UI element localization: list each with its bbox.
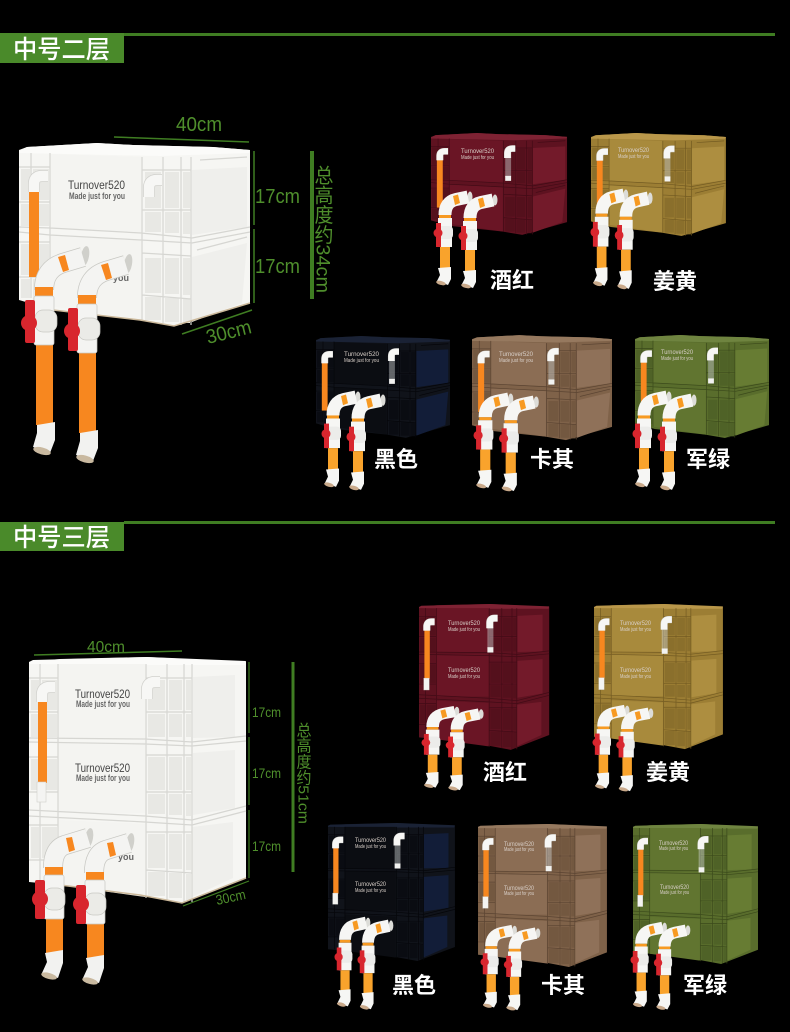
colour option: wine red, three-layer: Made just for you bbox=[448, 674, 480, 680]
colour option: wine red, two-layer: Made just for you bbox=[461, 155, 494, 161]
colour option: khaki, two-layer: Made just for you bbox=[499, 358, 533, 364]
colour option: khaki, two-layer: Turnover520 bbox=[499, 351, 533, 358]
colour option: army green, three-layer: Turnover520 bbox=[660, 884, 689, 891]
colour option: khaki, three-layer bbox=[478, 824, 607, 1011]
colour option: black, three-layer bbox=[328, 823, 455, 1010]
colour option: wine red, two-layer: 酒红 bbox=[490, 268, 534, 293]
crate logo: Turnover520 bbox=[68, 180, 125, 192]
crate logos: Turnover520 bbox=[75, 763, 130, 775]
colour option: army green, three-layer: Made just for you bbox=[660, 890, 689, 896]
colour option: black, three-layer: Turnover520 bbox=[355, 881, 386, 888]
colour option: khaki, two-layer: 卡其 bbox=[530, 447, 574, 472]
colour option: ginger yellow, three-layer: 姜黄 bbox=[646, 760, 690, 785]
colour option: black, two-layer: Turnover520 bbox=[344, 351, 379, 358]
colour option: ginger yellow, two-layer: Made just for you bbox=[618, 154, 649, 160]
colour option: wine red, three-layer: Made just for you bbox=[448, 627, 480, 633]
colour option: black, three-layer: Turnover520 bbox=[355, 837, 386, 844]
header: 中号三层: 中号三层 bbox=[13, 524, 110, 552]
colour option: army green, three-layer: Turnover520 bbox=[659, 840, 688, 847]
white two-layer crate bbox=[19, 143, 250, 326]
dimension: layer heights 17cm: 17cm bbox=[255, 256, 300, 278]
dimension: width 40cm: 40cm bbox=[87, 639, 125, 656]
dimension: layer heights 17cm bbox=[254, 151, 300, 303]
dimension: depth 30cm: 30cm bbox=[214, 886, 247, 908]
colour option: ginger yellow, three-layer: Turnover520 bbox=[620, 667, 651, 674]
dimension: layer heights 17cm: 17cm bbox=[252, 765, 281, 781]
panel: two-layer white tank with dimensions bbox=[19, 114, 333, 465]
crate logos bbox=[75, 689, 134, 862]
panel: three-layer white tank with dimensions bbox=[29, 639, 312, 986]
colour option: ginger yellow, two-layer: 姜黄 bbox=[653, 269, 697, 294]
dimension: layer heights 17cm: 17cm bbox=[252, 704, 281, 720]
dimension: layer heights 17cm bbox=[249, 662, 281, 878]
dimension: depth 30cm bbox=[183, 881, 249, 908]
crate logos: Turnover520 bbox=[75, 689, 130, 701]
colour option: black, three-layer: Made just for you bbox=[355, 844, 386, 850]
colour option: ginger yellow, three-layer bbox=[592, 604, 723, 792]
dimension: width 40cm bbox=[114, 114, 249, 142]
drain pipes and valves bbox=[32, 827, 136, 986]
colour option: army green, three-layer bbox=[630, 824, 758, 1011]
colour option: ginger yellow, three-layer: Turnover520 bbox=[620, 620, 651, 627]
colour option: wine red, three-layer: Turnover520 bbox=[448, 620, 480, 627]
colour option: khaki, three-layer: Made just for you bbox=[504, 891, 534, 897]
header: 中号二层: 中号二层 bbox=[13, 36, 110, 64]
crate logos: Made just for you bbox=[76, 773, 130, 783]
colour option: army green, three-layer: 军绿 bbox=[683, 973, 727, 998]
colour option: khaki, three-layer: Turnover520 bbox=[504, 841, 534, 848]
colour option: black, two-layer: Made just for you bbox=[344, 358, 379, 364]
dimension: total height 51cm: 总高度约51cm bbox=[294, 722, 312, 824]
colour option: khaki, three-layer: Made just for you bbox=[504, 847, 534, 853]
dimension: depth 30cm bbox=[182, 310, 254, 349]
dimension: width 40cm: 40cm bbox=[176, 114, 222, 136]
dimension: layer heights 17cm: 17cm bbox=[255, 186, 300, 208]
crate logo: you bbox=[113, 273, 129, 283]
crate logo: Made just for you bbox=[69, 191, 125, 201]
colour option: army green, three-layer: Made just for you bbox=[659, 846, 688, 852]
colour option: black, three-layer: 黑色 bbox=[392, 973, 436, 998]
colour option: ginger yellow, two-layer: Turnover520 bbox=[618, 147, 649, 154]
colour option: wine red, three-layer: 酒红 bbox=[483, 760, 527, 785]
colour option: army green, two-layer bbox=[632, 335, 769, 491]
dimension: layer heights 17cm: 17cm bbox=[252, 838, 281, 854]
colour option: black, three-layer: Made just for you bbox=[355, 888, 386, 894]
crate logo bbox=[68, 180, 129, 283]
header: 中号二层 bbox=[0, 33, 775, 64]
dimension: depth 30cm: 30cm bbox=[204, 316, 254, 349]
colour option: ginger yellow, three-layer: Made just for you bbox=[620, 627, 651, 633]
colour option: wine red, three-layer bbox=[419, 604, 549, 791]
colour option: ginger yellow, three-layer: Made just for you bbox=[620, 674, 651, 680]
crate logos: Made just for you bbox=[76, 699, 130, 709]
colour option: wine red, two-layer: Turnover520 bbox=[461, 148, 494, 155]
colour option: black, two-layer bbox=[316, 336, 450, 491]
dimension: total height 34cm: 总高度约34cm bbox=[312, 165, 333, 293]
colour option: army green, two-layer: Made just for you bbox=[661, 356, 693, 362]
colour option: army green, two-layer: Turnover520 bbox=[661, 349, 693, 356]
colour option: khaki, three-layer: Turnover520 bbox=[504, 885, 534, 892]
colour option: khaki, two-layer bbox=[472, 335, 612, 492]
drain pipes and valves bbox=[21, 245, 134, 465]
crate logos: you bbox=[118, 852, 134, 862]
colour option: ginger yellow, two-layer bbox=[590, 133, 726, 294]
colour option: wine red, two-layer bbox=[431, 133, 567, 293]
colour option: khaki, three-layer: 卡其 bbox=[541, 973, 585, 998]
dimension: width 40cm bbox=[34, 639, 182, 656]
colour option: black, two-layer: 黑色 bbox=[374, 447, 418, 472]
colour option: wine red, three-layer: Turnover520 bbox=[448, 667, 480, 674]
header: 中号三层 bbox=[0, 521, 775, 552]
white three-layer crate bbox=[29, 657, 246, 903]
colour option: army green, two-layer: 军绿 bbox=[686, 447, 730, 472]
